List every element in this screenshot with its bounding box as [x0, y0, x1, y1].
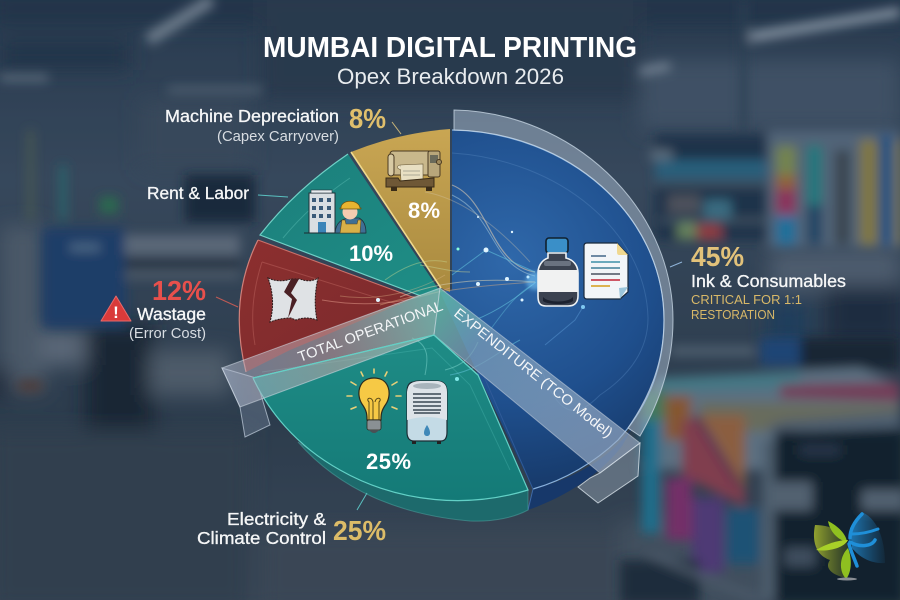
glass bar: left arm — [222, 288, 440, 407]
logo: butterfly figure — [814, 512, 885, 580]
value: 10 percent: 10% — [349, 241, 393, 266]
label: electricity and climate control: Climate Control — [197, 528, 326, 548]
label: wastage: 12% — [152, 275, 206, 306]
label: ink and consumables — [691, 241, 846, 322]
slice: electricity and climate control 25 percent — [253, 335, 528, 501]
icon: light bulb — [347, 369, 401, 433]
glass bar: right arm — [434, 288, 640, 473]
ceiling lights — [750, 12, 900, 37]
icon: warning triangle — [101, 296, 131, 322]
label: electricity and climate control — [197, 509, 386, 548]
printer and prints — [670, 346, 755, 356]
icon: office building — [304, 190, 366, 233]
slice: rent and labor 10 percent — [260, 154, 439, 296]
icon: ink bottle — [538, 238, 578, 306]
colour swatch wall — [768, 130, 900, 248]
glass bar end: right — [578, 443, 640, 503]
icon: torn material — [268, 278, 318, 322]
title: MUMBAI DIGITAL PRINTING — [263, 32, 637, 64]
label: wastage: Wastage — [137, 304, 206, 324]
slice: ink and consumables 45 percent — [440, 130, 664, 510]
icon: document — [584, 243, 628, 299]
label: wastage: (Error Cost) — [129, 325, 206, 342]
slice: machine depreciation 8 percent — [351, 129, 450, 292]
label: machine depreciation: 8% — [349, 103, 386, 134]
value: 25 percent: 25% — [366, 449, 411, 474]
label: rent and labor: Rent & Labor — [147, 183, 249, 203]
label: ink and consumables: 45% — [691, 241, 744, 272]
slice: wastage 12 percent — [239, 240, 415, 372]
teal slice outline through the bar — [253, 335, 478, 378]
leader lines — [216, 122, 682, 510]
shelves — [655, 135, 767, 240]
icon: dehumidifier — [407, 381, 447, 444]
value: 8 percent: 8% — [408, 198, 440, 223]
label: ink and consumables: RESTORATION — [691, 307, 775, 322]
teal slice extrusion — [298, 442, 528, 521]
label: ink and consumables: CRITICAL FOR 1:1 — [691, 292, 802, 307]
bar label: expenditure TCO model: EXPENDITURE (TCO Model) — [451, 306, 615, 441]
icon: printing machine — [386, 151, 442, 191]
bar label: total operational: TOTAL OPERATIONAL — [296, 298, 445, 366]
label: wastage — [129, 275, 206, 342]
pie chart — [222, 110, 673, 521]
label: electricity and climate control: Electricity & — [227, 509, 326, 529]
label: ink and consumables: Ink & Consumables — [691, 271, 846, 291]
label: machine depreciation: (Capex Carryover) — [217, 128, 339, 145]
blue slice extrusion — [528, 425, 634, 510]
label: machine depreciation: Machine Depreciation — [165, 106, 339, 126]
left machine — [42, 228, 126, 328]
icon: warning triangle: ! — [113, 303, 119, 322]
glass rim around blue slice — [454, 110, 673, 436]
label: machine depreciation — [165, 103, 386, 145]
subtitle: Opex Breakdown 2026 — [337, 64, 564, 89]
back glass bar end: left — [222, 368, 270, 437]
energy network lines — [322, 185, 583, 375]
icon: construction worker — [335, 201, 366, 233]
label: electricity and climate control: 25% — [333, 515, 386, 546]
